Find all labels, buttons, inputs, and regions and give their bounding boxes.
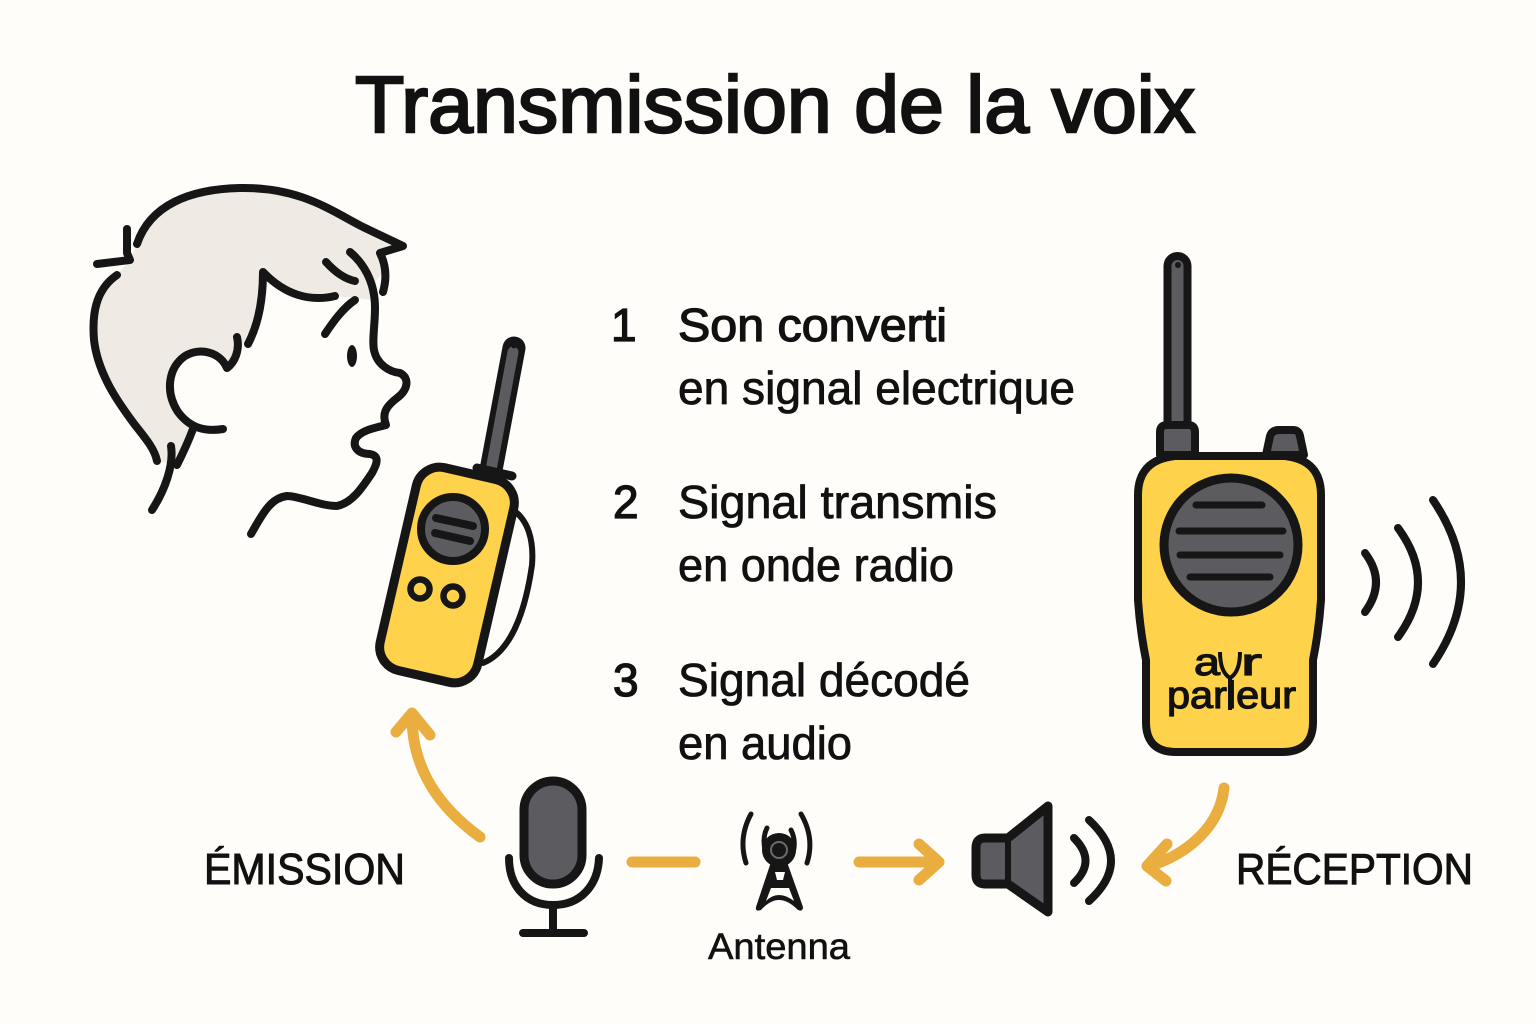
logo text xyxy=(1167,642,1296,717)
body xyxy=(1138,456,1321,752)
logo text: r xyxy=(1241,642,1263,684)
icon: right walkie-talkie xyxy=(1138,256,1321,752)
arrow: antenna to speaker xyxy=(859,844,939,880)
speaker grille xyxy=(1164,478,1298,612)
step 3: 3 xyxy=(613,654,639,706)
step 3: Signal décodé xyxy=(678,654,970,706)
title: Transmission de la voix xyxy=(355,60,1195,149)
collar xyxy=(1160,425,1195,455)
antenna xyxy=(491,348,514,470)
label: antenna: Antenna xyxy=(708,926,850,967)
label: reception: RÉCEPTION xyxy=(1236,845,1473,894)
antenna xyxy=(1168,256,1188,431)
icon: person head in profile xyxy=(92,188,406,534)
hair fill xyxy=(92,188,403,465)
step 1: 1 xyxy=(611,299,637,351)
step 2: Signal transmis xyxy=(678,476,997,528)
step 2: 2 xyxy=(613,476,639,528)
eye xyxy=(347,345,357,367)
steps text xyxy=(611,299,1075,769)
knob xyxy=(1266,430,1304,455)
buttons xyxy=(410,580,430,598)
step 3 xyxy=(613,654,970,769)
step 1: Son converti xyxy=(678,299,947,351)
step 2 xyxy=(613,476,997,591)
icon: left walkie-talkie xyxy=(375,344,532,688)
ear xyxy=(170,337,238,430)
face profile xyxy=(251,252,406,534)
hair outline xyxy=(137,188,403,292)
step 3: en audio xyxy=(678,717,852,769)
icon: antenna tower xyxy=(743,814,810,911)
label: emission: ÉMISSION xyxy=(204,845,405,894)
logo text: parleur xyxy=(1167,675,1296,717)
arrow: microphone to left walkie-talkie xyxy=(396,713,480,837)
arrow: microphone to antenna xyxy=(632,856,695,868)
body xyxy=(375,462,519,688)
speaker knob xyxy=(421,497,485,561)
strap xyxy=(483,510,532,663)
logo text: a xyxy=(1194,642,1221,684)
arrow: right walkie-talkie to speaker xyxy=(1147,788,1224,881)
step 1: en signal electrique xyxy=(678,362,1075,414)
step 2: en onde radio xyxy=(678,539,954,591)
icon: sound waves from right walkie-talkie xyxy=(1365,500,1461,664)
icon: microphone xyxy=(509,781,599,933)
fringe xyxy=(248,272,335,344)
step 1 xyxy=(611,299,1075,414)
icon: loudspeaker xyxy=(976,806,1111,912)
